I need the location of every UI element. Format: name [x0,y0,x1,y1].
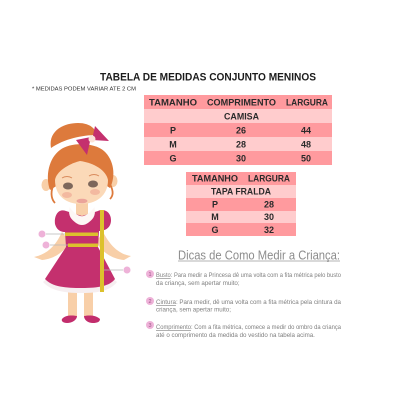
measuring tape: waist [68,244,98,247]
measuring tape: bust [65,232,98,236]
table: camisa: G [169,154,177,164]
tip 2: cintura: criança, sem apertar muito; [156,306,231,314]
table: tapa fralda: 30 [264,212,274,222]
curls [52,186,55,203]
table: camisa: CAMISA [224,112,259,122]
tip 2: cintura [146,297,342,314]
petticoat [43,276,117,293]
table: camisa: 50 [301,154,311,164]
tip 3: comprimento: 3 [148,323,152,329]
arms [34,232,131,260]
measuring tape: length [100,210,104,292]
table: camisa: LARGURA [286,98,328,108]
label 3 [104,266,130,274]
ears [42,179,50,191]
eyes [63,182,73,190]
illustration: girl [34,123,131,323]
table: camisa: P [170,126,176,136]
face [55,161,108,204]
title: TABELA DE MEDIDAS CONJUNTO MENINOS [100,72,316,84]
tip 3: comprimento: Comprimento: Com a fita métrica, comece a medir do ombro da criança [156,324,342,331]
tip 3: comprimento [146,321,342,339]
table: tapa fralda: P [212,200,218,210]
shoes [62,315,100,323]
collar [70,209,94,224]
table: camisa: M [169,140,177,150]
table: camisa: 44 [301,126,311,136]
table: camisa: TAMANHO [149,98,197,108]
hair bun [51,123,97,148]
table: camisa: 30 [236,154,246,164]
tip 2: cintura: Cintura: Para medir, dê uma volta com a fita métrica pela cintura da [156,299,342,306]
table: tapa fralda [186,172,296,236]
legs [68,288,93,317]
tip 1: busto: da criança, sem apertar muito; [156,280,240,287]
tip 3: comprimento: até o comprimento da medida do vestido na tabela acima. [156,332,315,339]
table: tapa fralda: TAMANHO [192,174,238,184]
table: camisa: 28 [236,140,246,150]
eyebrows [62,176,72,178]
table: tapa fralda: LARGURA [248,174,290,184]
heading: dicas: Dicas de Como Medir a Criança: [178,248,340,262]
table: tapa fralda: TAPA FRALDA [211,186,271,196]
table: tapa fralda: G [211,225,219,235]
table: tapa fralda: 32 [264,225,274,235]
table: tapa fralda: 28 [264,200,274,210]
note: * MEDIDAS PODEM VARIAR ATE 2 CM [32,86,136,92]
bow [76,126,109,155]
table: camisa: COMPRIMENTO [207,98,276,108]
tip 2: cintura: 2 [148,299,152,305]
label 1 [38,230,65,238]
tip 1: busto: Busto: Para medir a Princesa dê uma volta com a fita métrica pelo busto [156,272,342,279]
table: camisa: 26 [236,126,246,136]
neck [76,200,88,216]
mouth [76,199,88,203]
tip 1: busto: 1 [148,272,152,278]
hair [48,144,113,190]
table: camisa: 48 [301,140,311,150]
table: camisa [144,95,332,165]
cheeks [62,192,72,198]
tip 1: busto [146,270,342,287]
dress [45,210,115,288]
table: tapa fralda: M [211,212,219,222]
label 2 [42,242,68,248]
